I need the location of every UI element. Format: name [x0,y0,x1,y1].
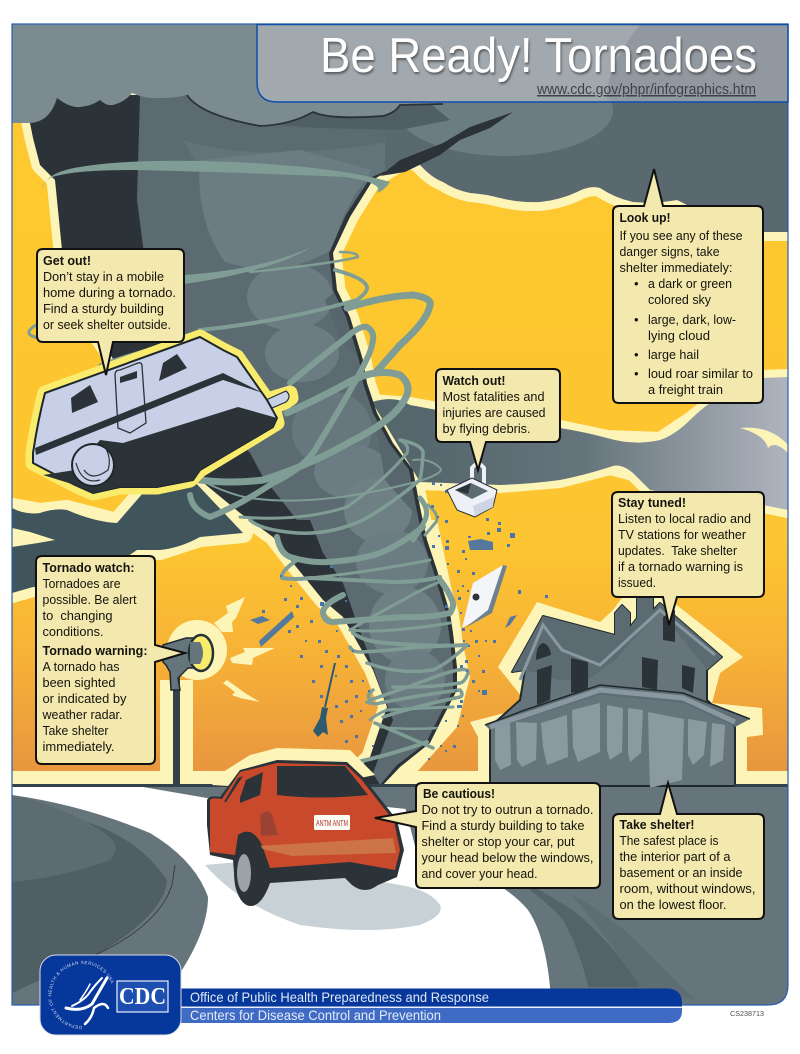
callout: tornado watch and warning: Tornado watch: [42,560,134,575]
house windows [536,610,695,705]
upper right storm cloud rim [410,165,788,241]
siren head [163,635,213,690]
trailer wheel [72,444,114,486]
callout: stay tuned: issued. [618,575,656,590]
callout: tornado watch and warning: conditions. [42,624,104,639]
HHS seal text: DEPARTMENT OF HEALTH & HUMAN SERVICES USA [48,960,114,1030]
callout: look up: Look up! [620,210,670,225]
callout: stay tuned [612,492,764,625]
top storm cloud [12,24,640,126]
callout: take shelter: The safest place is [620,833,719,848]
callout: watch out: injuries are caused [442,405,546,420]
sky background [12,123,788,771]
license plate [314,815,350,830]
CDC and HHS logo panel [40,954,182,1036]
upper right cloud body [185,24,788,232]
tornado pale rim [30,95,470,785]
callout: take shelter: Take shelter! [620,817,694,832]
callout: look up: danger signs, take [620,244,720,259]
callout: look up: • [634,312,639,327]
callout: watch out: Most fatalities and [442,389,544,404]
callout: take shelter: basement or an inside [620,865,742,880]
callout: stay tuned: if a tornado warning is [618,559,743,574]
callout: look up: a dark or green [648,276,732,291]
HHS eagle [66,978,108,1024]
callout: look up: a freight train [648,382,723,397]
callout: get out: Get out! [43,253,91,268]
tornado funnel [30,95,457,785]
callout: watch out [436,369,560,470]
car pale halo [212,748,375,790]
callout: get out: home during a tornado. [43,285,176,300]
callout: take shelter: room, without windows, [620,881,756,896]
callout: look up: lying cloud [648,328,710,343]
callout: stay tuned: Listen to local radio and [618,511,751,526]
publication code: CS238713 [730,1011,764,1018]
right mid storm cloud band [372,377,788,510]
callout: watch out: by flying debris. [442,421,530,436]
debris: plank and scraps [250,539,517,647]
tornado swirl bands [29,161,468,763]
debris: broom [313,663,335,737]
callout: look up: large hail [648,347,699,362]
right mid cloud rim [372,377,788,510]
callout: be cautious: shelter or stop your car, put [422,834,575,849]
callout: tornado watch and warning: Tornadoes are [42,576,120,591]
callout: tornado watch and warning: weather radar. [42,707,122,722]
callout: get out [37,249,184,375]
title banner [257,24,788,102]
callout: tornado watch and warning: Tornado warning: [42,643,148,658]
left mid cloud rim [12,480,243,593]
callout: be cautious: Do not try to outrun a tornado. [422,802,594,817]
callout: tornado watch and warning: A tornado has [42,659,120,674]
red car [207,760,404,906]
callout: look up: • [634,347,639,362]
callout: tornado watch and warning: immediately. [42,739,114,754]
callout: tornado watch and warning: Take shelter [42,723,109,738]
callout: look up: colored sky [648,292,711,307]
right lawn [400,787,788,1005]
ground and road [12,784,788,1005]
footer text line 1: Office of Public Health Preparedness and Response [190,989,489,1005]
callout: look up: loud roar similar to [648,366,753,381]
callout: look up [613,169,763,403]
debris: flying sink [447,464,497,517]
callout: tornado watch and warning: or indicated by [42,691,127,706]
CDC mark: CDC [119,984,166,1010]
lower pale horizon band [12,771,788,784]
callout: look up: If you see any of these [620,228,742,243]
flying mobile home [33,337,291,493]
callout: be cautious: your head below the windows, [422,850,594,865]
house [470,598,763,787]
callout: tornado watch and warning: possible. Be alert [42,592,137,607]
car wheel [234,846,266,906]
left mid storm cloud band [12,480,243,593]
lamp post pale halo and pole [160,597,275,787]
callout: be cautious: Find a sturdy building to take [422,818,584,833]
footer organisation bars [178,988,682,1023]
callout: watch out: Watch out! [442,373,506,388]
car shadow [205,860,441,930]
callout: look up: • [634,366,639,381]
callout: look up: large, dark, low- [648,312,736,327]
callout: look up: shelter immediately: [620,260,732,275]
website link: www.cdc.gov/phpr/infographics.htm [536,81,756,98]
callout: get out: Don’t stay in a mobile [43,269,164,284]
callout: tornado watch and warning [36,556,185,764]
callout: stay tuned: Stay tuned! [618,495,686,510]
callout: be cautious: and cover your head. [422,866,538,881]
left lawn [12,795,208,1005]
callout: be cautious: Be cautious! [423,786,495,801]
callout: tornado watch and warning: to changing [42,608,112,623]
callout: stay tuned: updates. Take shelter [618,543,738,558]
callout: take shelter [613,783,764,919]
debris: flying door [462,565,507,628]
house porch columns [495,703,725,788]
debris dust specks [262,482,548,760]
callout: stay tuned: TV stations for weather [618,527,747,542]
footer text line 2: Centers for Disease Control and Prevention [190,1007,441,1023]
callout: be cautious [375,783,600,888]
callout: look up: • [634,276,639,291]
callout: get out: or seek shelter outside. [43,317,171,332]
title text: Be Ready! Tornadoes [320,29,757,83]
license plate: ANTM ANTM [316,818,348,828]
top cloud dark underline [187,95,443,126]
callout: take shelter: on the lowest floor. [620,897,726,912]
callout: get out: Find a sturdy building [43,301,164,316]
callout: tornado watch and warning: been sighted [42,675,116,690]
callout: take shelter: the interior part of a [620,849,731,864]
